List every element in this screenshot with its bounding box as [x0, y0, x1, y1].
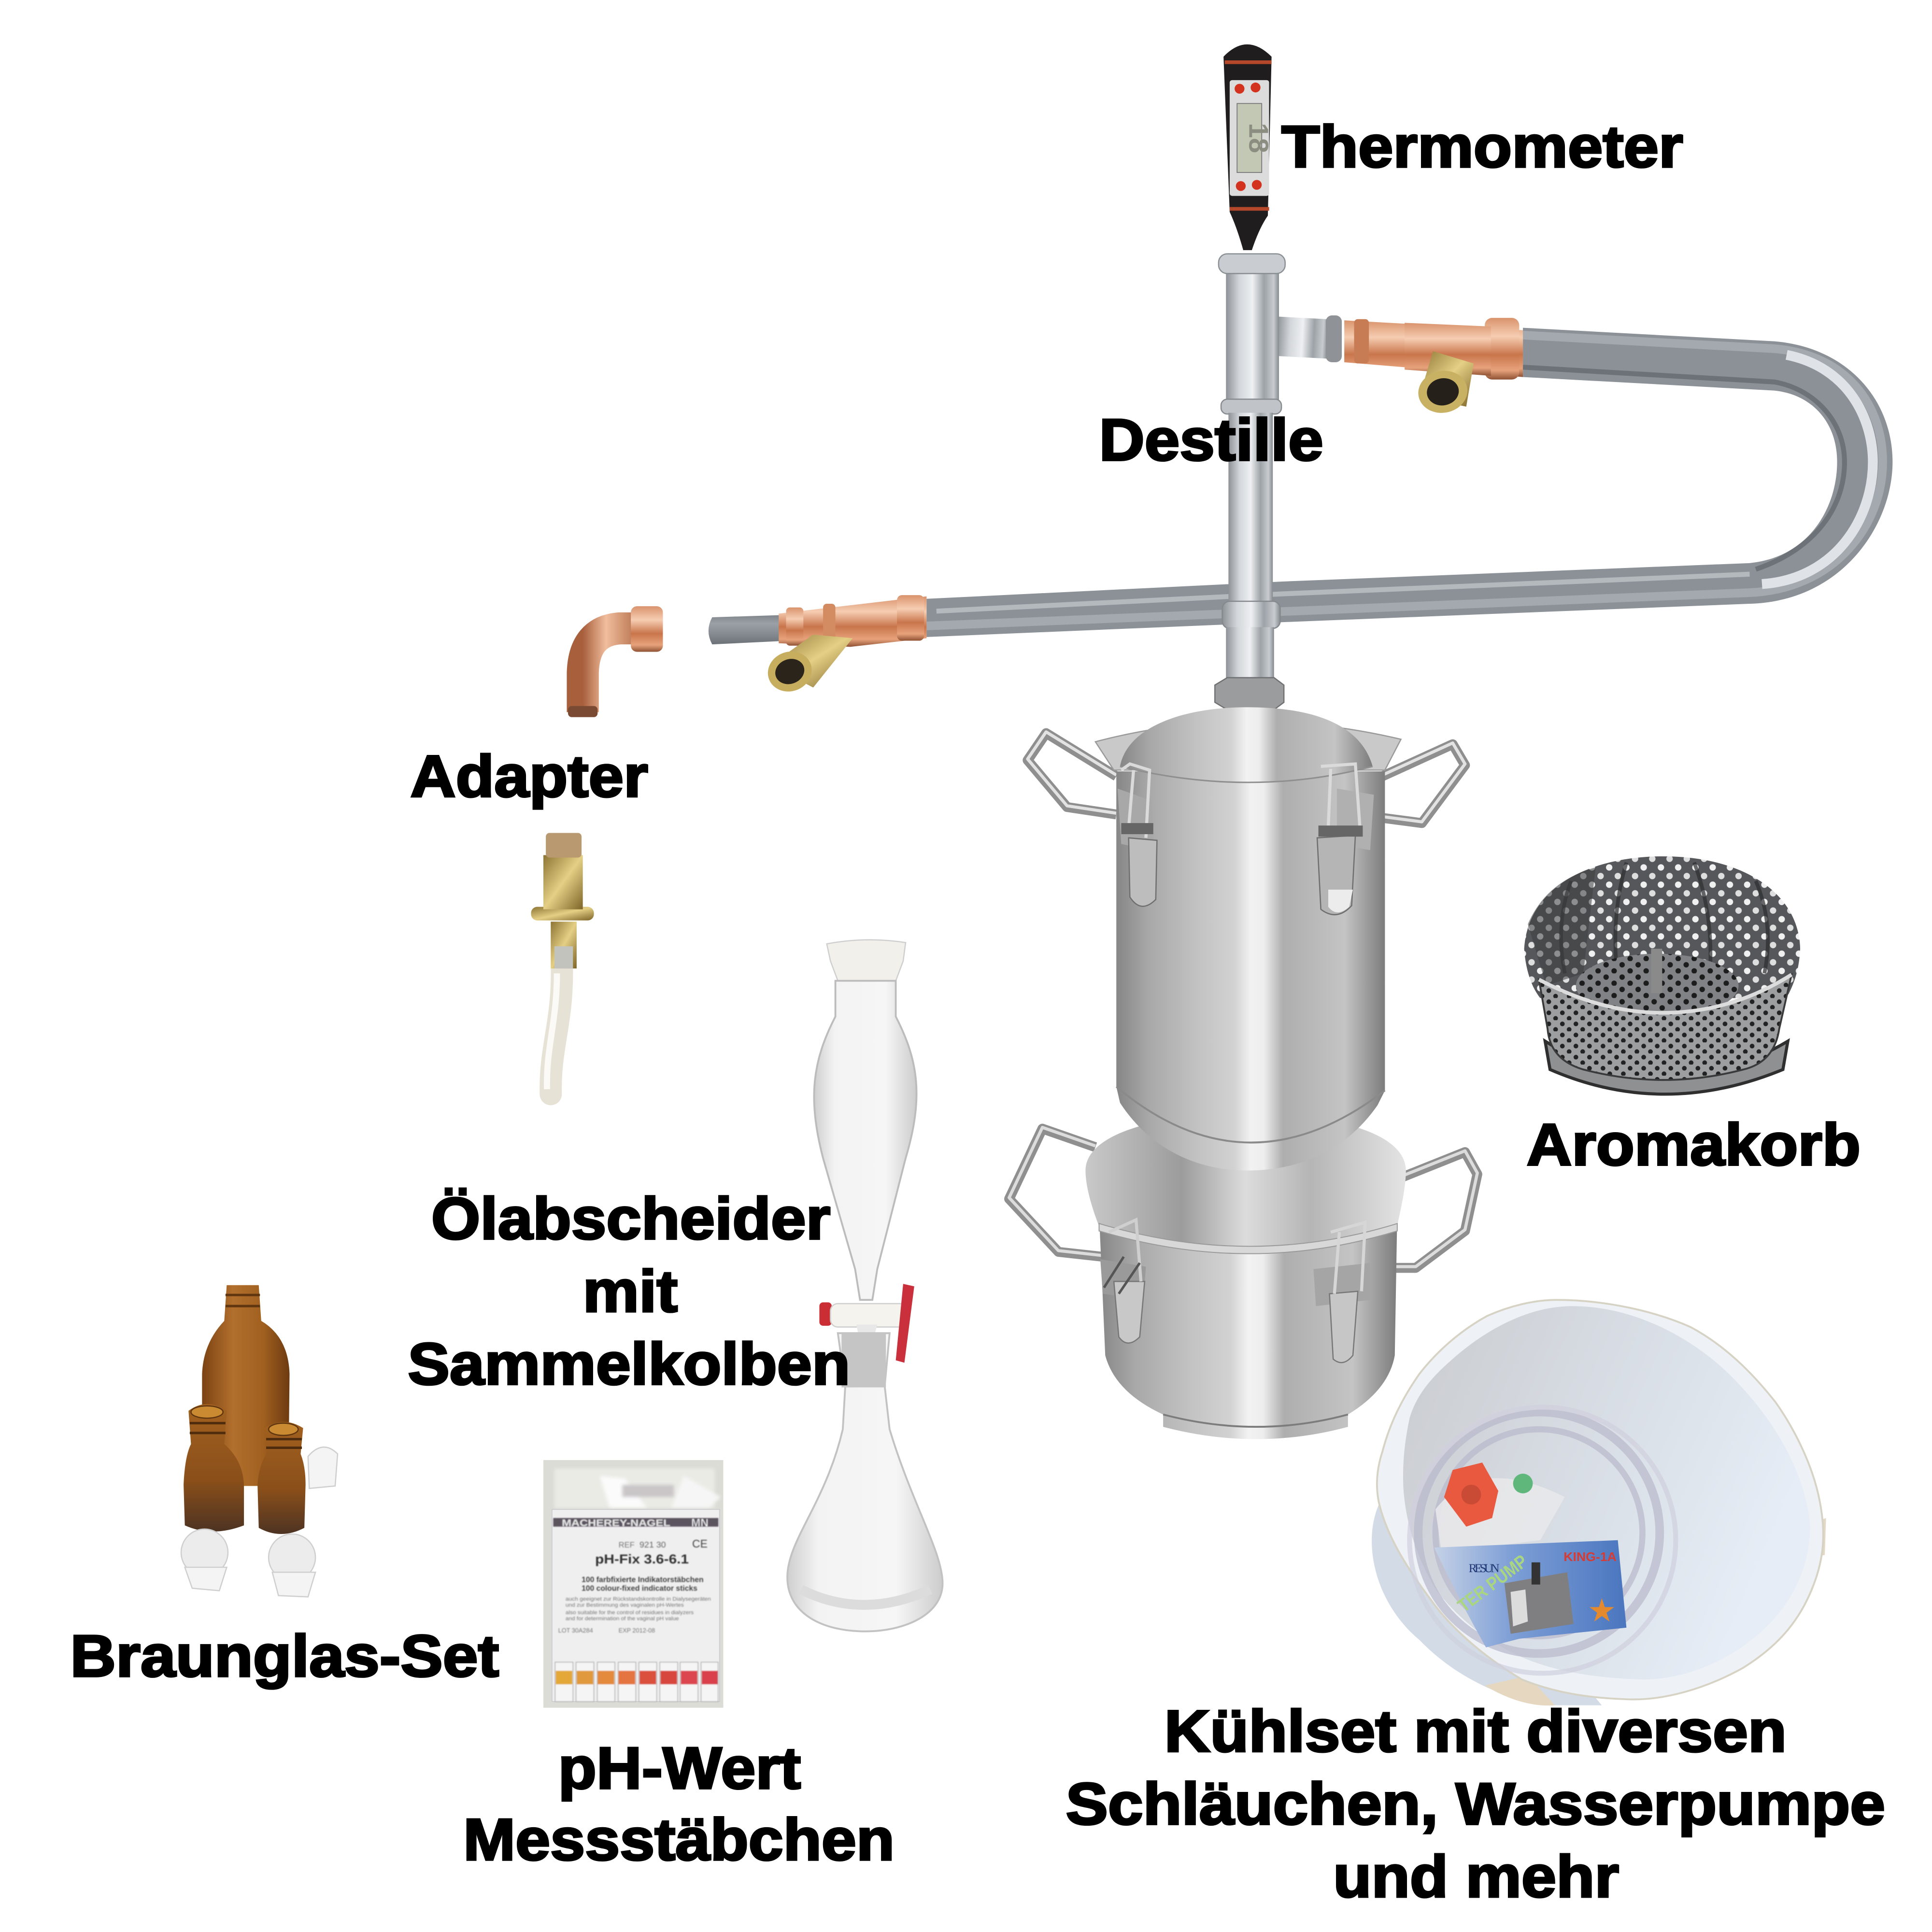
- label: Oelabscheider mit Sammelkolben: Sammelkolben: [408, 1331, 850, 1397]
- colour scale: [555, 1662, 718, 1702]
- label: pH-Wert Messstaebchen: pH-Wert: [558, 1735, 801, 1801]
- bucket outer wall: [1372, 1502, 1602, 1705]
- lower pot: [1009, 1114, 1477, 1439]
- upper pot: [1028, 707, 1465, 1170]
- basket floor: [1576, 953, 1738, 1018]
- pH indicator pack: pH-Fix 3.6-6.1: [595, 1552, 689, 1566]
- label: Oelabscheider mit Sammelkolben: [408, 1185, 850, 1397]
- small bottle left: [184, 1404, 244, 1532]
- pH indicator pack: 100 colour-fixed indicator sticks: [582, 1584, 697, 1592]
- pH indicator pack: MN: [691, 1517, 709, 1529]
- white caps: [181, 1447, 338, 1597]
- pH indicator pack: EXP 2012-08: [619, 1627, 655, 1634]
- Kuehlset bucket: [1372, 1300, 1826, 1705]
- funnel glass: [814, 981, 917, 1300]
- label: Thermometer: Thermometer: [1281, 114, 1683, 180]
- label: Destille: Destille: [1099, 407, 1323, 473]
- label: Kuehlset: Kühlset mit diversen: [1165, 1698, 1787, 1764]
- thin tube left end: [709, 615, 789, 644]
- stopcock: [819, 1284, 914, 1363]
- basket bottom ring: [1545, 1041, 1788, 1094]
- pH indicator pack: [543, 1460, 723, 1708]
- water pump box: TER PUMP: [1454, 1551, 1531, 1616]
- water pump box: [1434, 1540, 1626, 1648]
- pH indicator pack: REF: [619, 1540, 635, 1549]
- Braunglas bottles: [181, 1285, 338, 1597]
- coiled tubing: [1409, 1407, 1676, 1673]
- brass adapter with hose: [531, 833, 594, 1094]
- pH indicator pack: MACHEREY-NAGEL: [562, 1518, 670, 1528]
- label: pH-Wert Messstaebchen: Messstäbchen: [463, 1806, 895, 1873]
- copper tee upper: [1344, 318, 1523, 417]
- water pump box: KING-1A: [1563, 1550, 1617, 1564]
- bucket rim: [1377, 1300, 1823, 1699]
- large bottle: [202, 1285, 289, 1486]
- stopper: [827, 940, 906, 981]
- basket front wall: [1539, 975, 1791, 1080]
- thermometer: 18: [1244, 123, 1274, 153]
- steel riser with tee: [1215, 254, 1342, 710]
- pH indicator pack: and for determination of the vaginal pH value: [566, 1616, 679, 1622]
- copper tee lower left: [762, 595, 926, 697]
- hex nut: [1215, 678, 1284, 710]
- label: Oelabscheider mit Sammelkolben: mit: [583, 1258, 678, 1324]
- upper pot handles: [1028, 733, 1465, 823]
- basket back wall: [1524, 856, 1800, 998]
- bucket interior: [1403, 1306, 1810, 1679]
- lower pot latch left: [1100, 1220, 1146, 1343]
- lower pot handles: [1009, 1129, 1477, 1268]
- label: Kuehlset: und mehr: [1333, 1843, 1619, 1909]
- collecting flask: [787, 1333, 943, 1632]
- label: pH-Wert Messstaebchen: [463, 1735, 895, 1873]
- condenser U tube: [926, 328, 1892, 637]
- label: Oelabscheider mit Sammelkolben: Ölabscheider: [431, 1185, 830, 1251]
- label: Adapter: Adapter: [410, 743, 648, 809]
- Aromakorb basket: [1524, 856, 1800, 1094]
- pH indicator pack: LOT 30A284: [558, 1627, 593, 1634]
- copper elbow adapter: [568, 606, 663, 717]
- upper pot latch right: [1317, 764, 1374, 915]
- water pump box: RESUN: [1469, 1561, 1500, 1575]
- pH indicator pack: 921 30: [639, 1540, 666, 1549]
- pump: [1505, 1572, 1574, 1634]
- pH indicator pack: 100 farbfixierte Indikatorstäbchen: [582, 1576, 704, 1584]
- upper pot latch left: [1118, 764, 1157, 906]
- brass outlet upper: [1415, 351, 1474, 417]
- star: ★: [1588, 1593, 1616, 1629]
- brand strip: [553, 1518, 718, 1527]
- pH indicator pack: CE: [692, 1537, 708, 1550]
- pH indicator pack: auch geeignet zur Rückstandskontrolle in Dialysegeräten: [566, 1596, 711, 1602]
- label: Braunglas-Set: Braunglas-Set: [70, 1623, 499, 1689]
- label: Aromakorb: Aromakorb: [1527, 1111, 1861, 1178]
- pH indicator pack: also suitable for the control of residues in dialyzers: [566, 1610, 694, 1616]
- small bottle right: [257, 1422, 306, 1534]
- label: Kuehlset: Schläuchen, Wasserpumpe: [1066, 1771, 1885, 1837]
- brass outlet lower left: [762, 635, 852, 697]
- thermometer: [1223, 44, 1274, 250]
- pH indicator pack: und zur Bestimmung des vaginalen pH-Wertes: [566, 1603, 684, 1608]
- lower pot latch right: [1313, 1222, 1370, 1363]
- bag with red fitting: [1435, 1463, 1565, 1552]
- label: Kuehlset: [1066, 1698, 1885, 1909]
- Oelabscheider separatory funnel: [787, 940, 943, 1632]
